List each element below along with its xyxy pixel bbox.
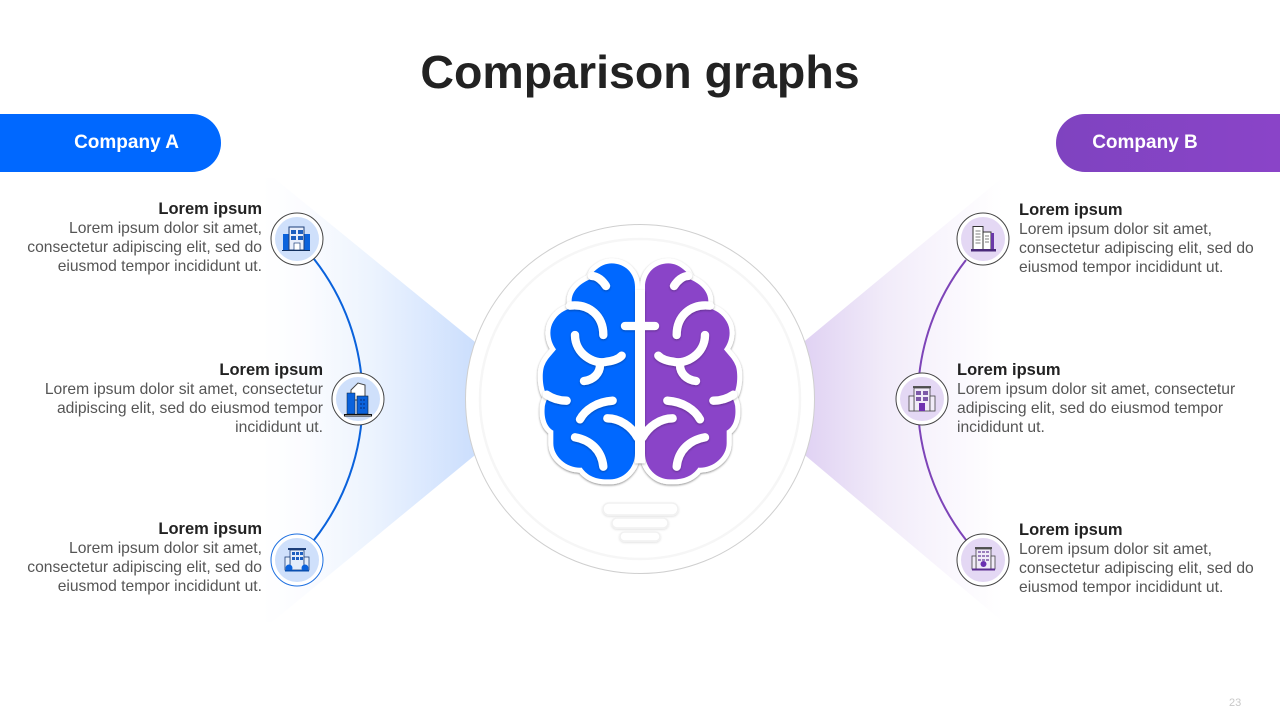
connector arc: Company A bbox=[314, 259, 363, 540]
icon: towers B1 bbox=[957, 213, 1009, 265]
icon: office building A1 bbox=[271, 213, 323, 265]
brain bbox=[543, 263, 737, 479]
label: Company B: Company B bbox=[1092, 132, 1198, 153]
text block: B2: adipiscing elit, sed do eiusmod tempor bbox=[957, 400, 1223, 417]
label: Company A: Company A bbox=[74, 132, 179, 153]
text block: B2: Lorem ipsum dolor sit amet, consectetur bbox=[957, 381, 1235, 398]
icon: hotel B3 bbox=[957, 534, 1009, 586]
text block: A2: incididunt ut. bbox=[235, 419, 323, 436]
brain right half bbox=[645, 263, 737, 479]
text block: B1 bbox=[1019, 201, 1254, 276]
text block: A1 bbox=[27, 200, 262, 275]
central circle bbox=[466, 224, 814, 574]
text block: B2 bbox=[957, 361, 1235, 436]
brain folds bbox=[547, 276, 733, 467]
text block: B3 bbox=[1019, 521, 1254, 596]
text block: A3: eiusmod tempor incididunt ut. bbox=[58, 578, 262, 595]
brain left half bbox=[543, 263, 635, 479]
label: Company B bbox=[1056, 114, 1280, 172]
text block: A1: consectetur adipiscing elit, sed do bbox=[27, 239, 262, 256]
right gradient cone bbox=[800, 177, 1003, 622]
text block: B2: Lorem ipsum bbox=[957, 361, 1061, 379]
icon: towers A2 bbox=[332, 373, 384, 425]
text block: A2 bbox=[45, 361, 323, 436]
text block: B1: consectetur adipiscing elit, sed do bbox=[1019, 240, 1254, 257]
text block: A3 bbox=[27, 520, 262, 595]
left gradient cone bbox=[264, 178, 480, 622]
text block: B1: eiusmod tempor incididunt ut. bbox=[1019, 259, 1223, 276]
icon: hotel B2 bbox=[896, 373, 948, 425]
inner ring bbox=[480, 239, 800, 559]
text block: B3: Lorem ipsum dolor sit amet, bbox=[1019, 541, 1212, 558]
text block: A2: adipiscing elit, sed do eiusmod tempor bbox=[57, 400, 323, 417]
label: Company A bbox=[0, 114, 221, 172]
lightbulb base bbox=[603, 503, 678, 541]
text block: B1: Lorem ipsum dolor sit amet, bbox=[1019, 221, 1212, 238]
title: Comparison graphs bbox=[420, 46, 860, 98]
text block: B3: consectetur adipiscing elit, sed do bbox=[1019, 560, 1254, 577]
text block: B3: eiusmod tempor incididunt ut. bbox=[1019, 579, 1223, 596]
connector arc: Company B bbox=[918, 260, 966, 540]
text block: A3: consectetur adipiscing elit, sed do bbox=[27, 559, 262, 576]
text block: A2: Lorem ipsum dolor sit amet, consectetur bbox=[45, 381, 323, 398]
text block: B1: Lorem ipsum bbox=[1019, 201, 1123, 219]
brain outline bbox=[543, 263, 737, 479]
text block: A2: Lorem ipsum bbox=[219, 361, 323, 379]
text block: A1: Lorem ipsum dolor sit amet, bbox=[69, 220, 262, 237]
text block: A3: Lorem ipsum dolor sit amet, bbox=[69, 540, 262, 557]
text block: A1: eiusmod tempor incididunt ut. bbox=[58, 258, 262, 275]
text block: B3: Lorem ipsum bbox=[1019, 521, 1123, 539]
text block: A1: Lorem ipsum bbox=[158, 200, 262, 218]
icon: hotel A3 bbox=[271, 534, 323, 586]
text block: B2: incididunt ut. bbox=[957, 419, 1045, 436]
page number: 23 bbox=[1229, 697, 1241, 709]
text block: A3: Lorem ipsum bbox=[158, 520, 262, 538]
